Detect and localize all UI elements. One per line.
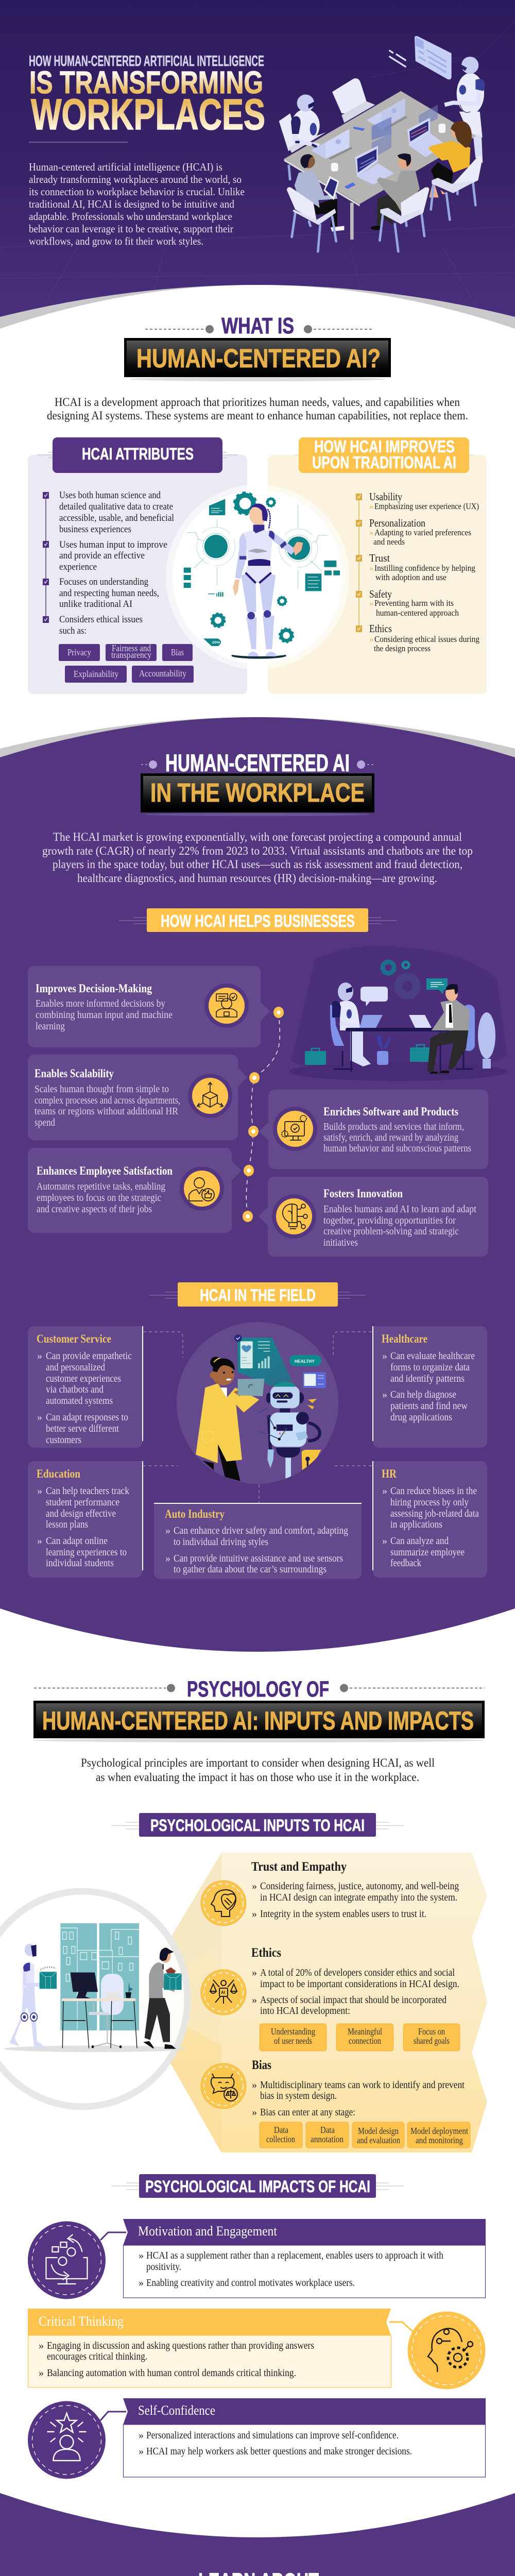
panel: HR: summarize employee bbox=[390, 1547, 465, 1558]
ethics tags: connection bbox=[349, 2036, 381, 2046]
input: bias: » bbox=[252, 2079, 257, 2091]
panel: HR: HR bbox=[382, 1467, 397, 1480]
panel: HR bbox=[373, 1461, 487, 1578]
card: enriches software and products: Enriches Software and Products bbox=[323, 1105, 458, 1118]
ethics tags: Meaningful bbox=[348, 2026, 382, 2037]
icon: chatbot with scales bbox=[201, 2063, 246, 2109]
card: improves decision-making: Improves Decision-Making bbox=[36, 982, 152, 995]
checklist: improvements: and needs bbox=[373, 537, 405, 547]
section background: purple workplace band bbox=[0, 717, 515, 1652]
ethics tags: shared goals bbox=[414, 2036, 450, 2046]
section heading: psychology of human-centered AI bbox=[32, 1677, 486, 1742]
card: enhances employee satisfaction bbox=[28, 1148, 242, 1233]
impact: self-confidence: HCAI may help workers ask better questions and make stronger decisions. bbox=[146, 2446, 412, 2457]
card: enriches software and products: satisfy, enrich, and reward by analyzing bbox=[323, 1132, 458, 1143]
section heading: Human-Centered AI in the workplace bbox=[141, 749, 374, 816]
worker with box bbox=[143, 1947, 182, 2049]
card: enables scalability: Enables Scalability bbox=[35, 1067, 114, 1080]
panel: education: » bbox=[37, 1535, 42, 1547]
intro paragraph: HCAI is a development approach that prioritizes human needs, values, and capabilities when bbox=[55, 396, 460, 409]
card: enriches software and products: human behavior and subconscious patterns bbox=[323, 1143, 471, 1154]
impact: motivation and engagement bbox=[28, 2219, 486, 2299]
icon: employee thumbs up bbox=[180, 1166, 224, 1211]
panel: HR: » bbox=[382, 1535, 387, 1547]
section heading: What is Human-Centered AI?: HUMAN-CENTERED AI? bbox=[136, 344, 381, 373]
section background: closing purple band bbox=[0, 2493, 515, 2576]
panel: healthcare: and identify patterns bbox=[390, 1373, 465, 1384]
market paragraph: healthcare diagnostics, and human resources (HR) decision-making—are growing. bbox=[77, 872, 437, 885]
input: ethics: Ethics bbox=[251, 1946, 281, 1960]
checklist: attributes: experience bbox=[59, 562, 97, 572]
input: bias: » bbox=[252, 2107, 257, 2118]
impact: self-confidence bbox=[28, 2398, 486, 2479]
icon: head with gear bbox=[408, 2311, 485, 2389]
bias tags: and evaluation bbox=[357, 2135, 400, 2145]
health data projection bbox=[234, 1334, 292, 1386]
panel: education: learning experiences to bbox=[46, 1547, 127, 1558]
hero intro text: behavior can leverage it to be creative, support their bbox=[29, 223, 233, 235]
hero intro text: workflows, and grow to fit their work styles. bbox=[29, 235, 203, 247]
panel: healthcare: Can help diagnose bbox=[390, 1389, 456, 1400]
hero intro text: adaptable. Professionals who understand workplace bbox=[29, 210, 232, 223]
impact: critical thinking: encourages critical thinking. bbox=[47, 2351, 147, 2362]
input: trust and empathy: Trust and Empathy bbox=[251, 1860, 347, 1874]
checklist: improvements: Personalization bbox=[369, 517, 425, 529]
panel: education: Can adapt online bbox=[46, 1535, 108, 1547]
input: trust and empathy: » bbox=[252, 1908, 257, 1920]
businessman bbox=[427, 984, 470, 1074]
checklist: attributes: Uses human input to improve bbox=[59, 539, 167, 550]
desk and laptops bbox=[346, 1015, 450, 1072]
panel: healthcare: » bbox=[382, 1350, 387, 1362]
market paragraph: The HCAI market is growing exponentially, with one forecast projecting a compound annual bbox=[53, 831, 462, 843]
card: improves decision-making bbox=[28, 966, 270, 1047]
bias tags: Data bbox=[274, 2125, 288, 2135]
checklist: improvements bbox=[356, 490, 479, 653]
checklist: attributes: such as: bbox=[59, 625, 87, 636]
impact: motivation and engagement: positivity. bbox=[146, 2261, 181, 2273]
healthy label: HEALTHY bbox=[295, 1359, 315, 1364]
input: ethics: Aspects of social impact that should be incorporated bbox=[260, 1994, 447, 2006]
panel: how HCAI improves upon traditional AI bbox=[268, 437, 487, 694]
robot laptop and seated robot bbox=[279, 94, 326, 153]
card: fosters innovation: initiatives bbox=[323, 1237, 358, 1248]
dashed timeline with nodes bbox=[246, 1012, 280, 1216]
psychology paragraph: Psychological principles are important to consider when designing HCAI, as well bbox=[81, 1756, 435, 1769]
intro paragraph bbox=[47, 396, 468, 422]
card: enhances employee satisfaction: Automates repetitive tasks, enabling bbox=[37, 1181, 165, 1192]
ethical issue tags bbox=[59, 643, 194, 683]
impact: critical thinking bbox=[28, 2309, 485, 2389]
panel: customer service: customers bbox=[46, 1434, 81, 1446]
impact: critical thinking: » bbox=[39, 2367, 44, 2379]
input: trust and empathy: Considering fairness, justice, autonomy, and well-being bbox=[260, 1880, 459, 1892]
impact: motivation and engagement: » bbox=[139, 2277, 144, 2289]
chairs and plants bbox=[305, 1005, 495, 1069]
checklist: attributes: unlike traditional AI bbox=[59, 599, 132, 609]
icon: AI scales: AI bbox=[221, 1990, 225, 1995]
panel: education: Can help teachers track bbox=[46, 1485, 129, 1497]
ethics tags: of user needs bbox=[274, 2036, 312, 2046]
laptops bbox=[311, 98, 445, 189]
card: enables scalability: teams or regions without additional HR bbox=[35, 1106, 179, 1117]
bias tags: annotation bbox=[311, 2134, 344, 2144]
bias tags bbox=[260, 2122, 470, 2148]
icon: scaling cube bbox=[188, 1074, 232, 1118]
ethical issue tags: Accountability bbox=[139, 668, 186, 679]
panel: healthcare: forms to organize data bbox=[390, 1362, 470, 1373]
panel: education: lesson plans bbox=[46, 1519, 88, 1530]
card: improves decision-making: learning bbox=[36, 1021, 65, 1032]
checklist: improvements: human-centered approach bbox=[376, 608, 459, 618]
psychology paragraph bbox=[81, 1756, 435, 1784]
checklist: attributes: Uses both human science and bbox=[59, 490, 161, 501]
panel: HCAI attributes bbox=[28, 437, 247, 694]
panel: education: » bbox=[37, 1485, 42, 1497]
panel: auto industry: to individual driving styles bbox=[174, 1536, 268, 1548]
input: bias bbox=[201, 2058, 470, 2148]
illustration: scientist and robot in circle bbox=[177, 1322, 338, 1484]
input: ethics: A total of 20% of developers consider ethics and social bbox=[260, 1967, 455, 1978]
checklist: improvements: Ethics bbox=[369, 622, 392, 635]
impact: self-confidence: » bbox=[139, 2446, 144, 2457]
checklist: improvements: » bbox=[369, 501, 374, 511]
ethical issue tags: transparency bbox=[111, 650, 151, 660]
card: fosters innovation bbox=[259, 1177, 488, 1257]
panel: auto industry: to gather data about the car’s surroundings bbox=[174, 1564, 327, 1575]
desk and chair bbox=[4, 1972, 185, 2052]
card: fosters innovation: Enables humans and AI to learn and adapt bbox=[323, 1204, 476, 1215]
impact: motivation and engagement: HCAI as a supplement rather than a replacement, enables users to approach it with bbox=[146, 2250, 443, 2261]
panel: education bbox=[28, 1461, 143, 1578]
panel: HR: feedback bbox=[390, 1557, 421, 1569]
icon: monitor with engagement bbox=[28, 2222, 106, 2299]
input: ethics: impact to be important considerations in HCAI design. bbox=[260, 1978, 459, 1990]
top chair bbox=[332, 78, 375, 123]
panel: HR: hiring process by only bbox=[390, 1497, 469, 1508]
illustration: robot and worker carrying boxes bbox=[0, 1891, 187, 2107]
panel: customer service: Can provide empathetic bbox=[46, 1350, 132, 1362]
checklist: attributes: Focuses on understanding bbox=[59, 577, 148, 587]
checklist: improvements: Usability bbox=[369, 490, 402, 503]
speech bubbles bbox=[360, 978, 448, 1006]
panel: healthcare bbox=[373, 1326, 487, 1448]
icon: head with heart bbox=[201, 1880, 246, 1926]
card: enhances employee satisfaction: employees to focus on the strategic bbox=[37, 1192, 161, 1204]
table bbox=[284, 91, 476, 240]
impact: self-confidence: » bbox=[139, 2430, 144, 2441]
input: ethics bbox=[201, 1946, 460, 2051]
impact: critical thinking: Critical Thinking bbox=[39, 2314, 124, 2329]
panel: healthcare: Healthcare bbox=[382, 1332, 427, 1345]
heading: improves: HOW HCAI IMPROVES bbox=[314, 437, 455, 456]
panel: education: student performance bbox=[46, 1497, 119, 1508]
input: ethics: into HCAI development: bbox=[260, 2005, 350, 2016]
man at laptop bbox=[371, 154, 420, 230]
robot figure bbox=[231, 503, 303, 659]
impact: motivation and engagement: Motivation and Engagement bbox=[138, 2224, 278, 2239]
panel: auto industry: Can provide intuitive assistance and use sensors bbox=[174, 1553, 343, 1564]
illustration: humanoid robot in circle bbox=[166, 484, 349, 670]
heading: psychological inputs: PSYCHOLOGICAL INPUTS TO HCAI bbox=[150, 1816, 365, 1835]
floating screen bbox=[390, 36, 452, 79]
checklist: improvements: » bbox=[369, 528, 374, 537]
panel: healthcare: » bbox=[382, 1389, 387, 1400]
hero background bbox=[0, 0, 515, 331]
panel: HR: Can analyze and bbox=[390, 1535, 449, 1547]
section heading: psychology of human-centered AI: PSYCHOLOGY OF bbox=[187, 1677, 329, 1702]
panel: HR: in applications bbox=[390, 1519, 442, 1530]
ethical issue tags: Bias bbox=[171, 647, 184, 657]
intro paragraph: designing AI systems. These systems are meant to enhance human capabilities, not replace them. bbox=[47, 409, 468, 422]
illustration: humanoid robot in circle: 20% bbox=[212, 641, 220, 645]
psychology paragraph: as when evaluating the impact it has on those who use it in the workplace. bbox=[96, 1771, 419, 1784]
panel: auto industry: Can enhance driver safety and comfort, adapting bbox=[174, 1525, 348, 1536]
panel: customer service: » bbox=[37, 1350, 42, 1362]
checklist: improvements: Considering ethical issues during bbox=[374, 634, 479, 644]
input: ethics: » bbox=[252, 1994, 257, 2006]
card: enables scalability: spend bbox=[35, 1117, 55, 1128]
icon: person deciding bbox=[204, 984, 249, 1028]
checklist: improvements: the design process bbox=[374, 643, 431, 653]
panel: education: and design effective bbox=[46, 1508, 116, 1519]
panel: healthcare: Can evaluate healthcare bbox=[390, 1350, 475, 1362]
panel: psychological inputs shape bbox=[134, 1853, 487, 2153]
title: HOW HUMAN-CENTERED ARTIFICIAL INTELLIGENCE bbox=[29, 53, 264, 70]
input: trust and empathy: in HCAI design can integrate empathy into the system. bbox=[260, 1892, 457, 1903]
market paragraph bbox=[42, 831, 473, 885]
standing robot bbox=[444, 57, 485, 163]
checklist: improvements: Adapting to varied preferences bbox=[374, 528, 471, 537]
impact: motivation and engagement: Enabling creativity and control motivates workplace users. bbox=[146, 2277, 355, 2289]
card: enables scalability: Scales human thought from simple to bbox=[35, 1083, 169, 1095]
panel: customer service: customer experiences bbox=[46, 1373, 121, 1384]
teal interface elements bbox=[187, 493, 328, 642]
ethics tags: Understanding bbox=[271, 2026, 315, 2037]
checklist: improvements: Emphasizing user experience (UX) bbox=[374, 501, 479, 511]
card: improves decision-making: combining human input and machine bbox=[36, 1009, 173, 1021]
card: enables scalability bbox=[28, 1055, 247, 1140]
heading: HCAI attributes bbox=[53, 437, 222, 473]
impact: self-confidence: Self-Confidence bbox=[138, 2403, 215, 2418]
card: fosters innovation: Fosters Innovation bbox=[323, 1187, 403, 1200]
panel: customer service: better serve different bbox=[46, 1423, 119, 1434]
ethics tags: Focus on bbox=[418, 2026, 445, 2037]
heading: HCAI in the field bbox=[149, 1282, 366, 1307]
panel: auto industry: » bbox=[165, 1553, 170, 1564]
card: enables scalability: complex processes and across departments, bbox=[35, 1095, 180, 1106]
icon: person with star bbox=[28, 2401, 106, 2479]
checklist: improvements: » bbox=[369, 563, 374, 573]
bias tags: Data bbox=[320, 2125, 335, 2135]
impact: critical thinking: Engaging in discussion and asking questions rather than providing answers bbox=[47, 2340, 314, 2351]
ethical issue tags: Privacy bbox=[67, 647, 91, 657]
hero intro text: Human-centered artificial intelligence (HCAI) is bbox=[29, 161, 222, 173]
checklist: improvements: Preventing harm with its bbox=[374, 598, 454, 608]
section heading: Human-Centered AI in the workplace: IN THE WORKPLACE bbox=[150, 778, 365, 807]
checklist: improvements: Trust bbox=[369, 552, 390, 564]
scan card bbox=[303, 1372, 326, 1388]
panel: customer service: via chatbots and bbox=[46, 1384, 104, 1395]
hero intro text: its connection to workplace behavior is crucial. Unlike bbox=[29, 185, 245, 198]
robot courier bbox=[9, 1944, 57, 2048]
impact: critical thinking: » bbox=[39, 2340, 44, 2351]
illustration: meeting table with robots and people bbox=[279, 36, 485, 251]
bias tags: Model deployment bbox=[410, 2126, 468, 2136]
hero intro text bbox=[29, 161, 245, 247]
heading: improves: UPON TRADITIONAL AI bbox=[312, 453, 456, 472]
panel: customer service bbox=[28, 1326, 143, 1448]
input: bias: bias in system design. bbox=[260, 2090, 337, 2102]
section heading: What is Human-Centered AI?: WHAT IS bbox=[221, 313, 294, 338]
panel: HR: assessing job-related data bbox=[390, 1508, 479, 1519]
dashed connectors bbox=[143, 1332, 372, 1503]
heading: psychological impacts: PSYCHOLOGICAL IMPACTS OF HCAI bbox=[145, 2177, 370, 2196]
bias tags: Model design bbox=[358, 2126, 399, 2136]
panel: auto industry: Auto Industry bbox=[165, 1507, 225, 1520]
card: enhances employee satisfaction: and creative aspects of their jobs bbox=[37, 1204, 152, 1215]
timeline nodes bbox=[243, 1007, 284, 1222]
card: fosters innovation: creative problem-solving and strategic bbox=[323, 1226, 459, 1237]
impact: self-confidence: Personalized interactions and simulations can improve self-confidence. bbox=[146, 2430, 399, 2441]
section heading: Human-Centered AI in the workplace: HUMAN-CENTERED AI bbox=[165, 749, 350, 776]
input: bias: Bias can enter at any stage: bbox=[260, 2107, 355, 2118]
ethics tags bbox=[260, 2024, 460, 2051]
hero intro text: already transforming workplaces around the world, so bbox=[29, 173, 242, 185]
input: ethics: » bbox=[252, 1967, 257, 1978]
panel: auto industry: » bbox=[165, 1525, 170, 1536]
market paragraph: growth rate (CAGR) of nearly 22% from 2023 to 2033. Virtual assistants and chatbots are the top bbox=[42, 844, 473, 857]
title bbox=[29, 53, 265, 142]
heading: how HCAI helps businesses: HOW HCAI HELPS BUSINESSES bbox=[161, 911, 355, 930]
impact: motivation and engagement: » bbox=[139, 2250, 144, 2261]
input: trust and empathy: » bbox=[252, 1880, 257, 1892]
impact: critical thinking: Balancing automation with human control demands critical thinking. bbox=[47, 2367, 296, 2379]
healthy label bbox=[289, 1355, 321, 1366]
checklist: attributes: detailed qualitative data to create bbox=[59, 501, 173, 512]
icon: lightbulb brain circuit bbox=[272, 1194, 316, 1239]
heading: HCAI attributes: HCAI ATTRIBUTES bbox=[82, 445, 194, 463]
input: bias: Multidisciplinary teams can work to identify and prevent bbox=[260, 2079, 465, 2091]
heading: improves bbox=[299, 437, 469, 473]
title: IS TRANSFORMING bbox=[29, 65, 263, 100]
man with tablet bbox=[295, 154, 344, 231]
card: enriches software and products: Builds products and services that inform, bbox=[323, 1121, 464, 1132]
heading: psychological inputs bbox=[111, 1813, 404, 1837]
checklist: attributes: accessible, usable, and beneficial bbox=[59, 513, 174, 523]
panel: customer service: Customer Service bbox=[37, 1332, 111, 1345]
input: trust and empathy bbox=[201, 1860, 459, 1926]
scientist bbox=[196, 1357, 264, 1481]
checklist: attributes: business experiences bbox=[59, 524, 131, 535]
robot bbox=[332, 982, 371, 1066]
card: improves decision-making: Enables more informed decisions by bbox=[36, 998, 165, 1009]
ethical issue tags: Explainability bbox=[74, 669, 118, 679]
heading: HCAI in the field: HCAI IN THE FIELD bbox=[200, 1286, 316, 1304]
panel: healthcare: patients and find new bbox=[390, 1400, 468, 1412]
panel: customer service: automated systems bbox=[46, 1395, 113, 1406]
panel: education: Education bbox=[37, 1467, 80, 1480]
bias tags: and monitoring bbox=[416, 2135, 463, 2145]
panel: HR: Can reduce biases in the bbox=[390, 1485, 477, 1497]
icon: monitor with gears bbox=[273, 1107, 317, 1151]
bias tags: collection bbox=[266, 2134, 295, 2144]
panel: customer service: and personalized bbox=[46, 1362, 105, 1373]
illustration: robot and businessman at desk bbox=[289, 946, 507, 1081]
checklist: attributes: and provide an effective bbox=[59, 550, 145, 561]
gears bbox=[383, 962, 417, 995]
heading: psychological impacts bbox=[111, 2174, 404, 2198]
title: WORKPLACES bbox=[31, 90, 265, 139]
heading: how HCAI helps businesses bbox=[119, 908, 397, 932]
card: enriches software and products bbox=[259, 1090, 488, 1169]
market paragraph: players in the space today, but other HCAI uses—such as risk assessment and fraud detection, bbox=[53, 858, 462, 871]
section heading: What is Human-Centered AI? bbox=[124, 313, 391, 381]
robot bbox=[258, 1382, 321, 1479]
checklist: attributes: and respecting human needs, bbox=[59, 588, 159, 599]
panel: HR: » bbox=[382, 1485, 387, 1497]
checklist: improvements: Safety bbox=[369, 588, 392, 600]
panel: healthcare: drug applications bbox=[390, 1412, 452, 1423]
ethical issue tags: Fairness and bbox=[112, 643, 151, 653]
checklist: improvements: Instilling confidence by helping bbox=[374, 563, 475, 573]
checklist: improvements: with adoption and use bbox=[375, 572, 447, 582]
checklist: attributes bbox=[43, 490, 174, 636]
panel: auto industry bbox=[154, 1503, 362, 1579]
hero intro text: traditional AI, HCAI is designed to be intuitive and bbox=[29, 198, 234, 210]
icon: AI scales bbox=[201, 1970, 246, 2015]
checklist: improvements: » bbox=[369, 598, 374, 608]
office window bbox=[60, 1923, 139, 2030]
lower chairs bbox=[287, 156, 483, 251]
card: enhances employee satisfaction: Enhances Employee Satisfaction bbox=[37, 1164, 173, 1177]
checklist: attributes: Considers ethical issues bbox=[59, 614, 143, 625]
checklist: improvements: » bbox=[369, 634, 374, 644]
woman in yellow top bbox=[428, 121, 472, 197]
panel: customer service: Can adapt responses to bbox=[46, 1412, 128, 1423]
panel: education: individual students bbox=[46, 1557, 114, 1569]
input: trust and empathy: Integrity in the system enables users to trust it. bbox=[260, 1908, 426, 1920]
panel: customer service: » bbox=[37, 1412, 42, 1423]
input: bias: Bias bbox=[252, 2058, 271, 2072]
card: fosters innovation: together, providing opportunities for bbox=[323, 1215, 456, 1226]
